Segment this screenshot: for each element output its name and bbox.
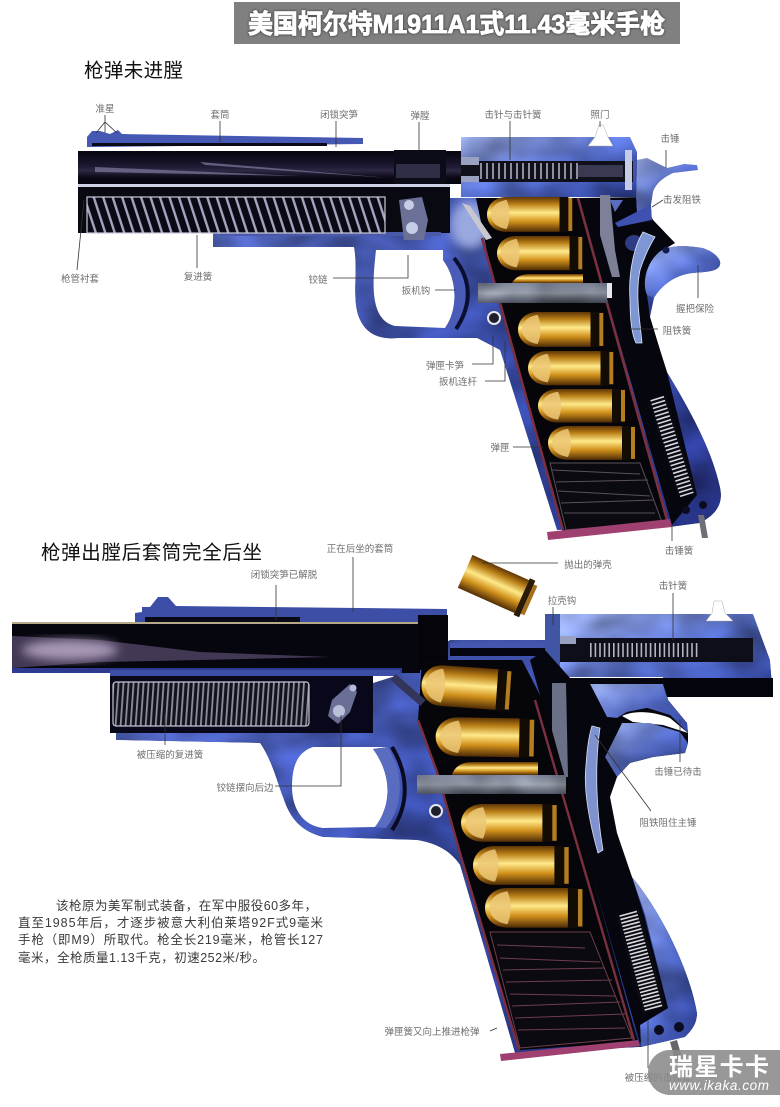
label: rear sight — [590, 109, 610, 127]
magazine spring — [550, 463, 662, 530]
label: extractor — [548, 595, 576, 625]
label: firing pin and spring: 击针与击针簧 — [484, 109, 542, 121]
compressed recoil spring — [113, 682, 309, 726]
description paragraph: 该枪原为美军制式装备，在军中服役60多年， — [56, 898, 317, 913]
link — [328, 684, 357, 724]
frame mid strips — [450, 643, 545, 648]
slide stop bar — [417, 775, 566, 794]
labels: top pistol — [61, 104, 714, 557]
internals behind magazine — [530, 650, 688, 1043]
label: hammer cocked — [654, 720, 702, 778]
trigger shadow — [443, 258, 466, 328]
label: link: 铰链 — [308, 274, 328, 286]
chamber — [394, 150, 446, 184]
label: sear spring: 阻铁簧 — [663, 325, 692, 337]
magazine catch — [488, 312, 500, 324]
label: chamber: 弹膛 — [410, 110, 430, 122]
cartridges in magazine — [487, 197, 635, 460]
label: trigger bar — [439, 340, 505, 388]
recoil spring — [87, 197, 385, 233]
slide top strip — [87, 130, 363, 147]
ejected case — [457, 553, 539, 619]
disconnector — [630, 232, 655, 343]
label: link — [308, 255, 408, 286]
label: mainspring: 击锤簧 — [665, 545, 694, 557]
magazine — [476, 198, 668, 532]
label: sear holds hammer — [595, 735, 697, 829]
firing pin spring — [590, 643, 698, 657]
description paragraph: 手枪（即M9）所取代。枪全长219毫米，枪管长127 — [18, 932, 323, 947]
cocked hammer — [590, 684, 688, 733]
barrel — [78, 151, 462, 184]
hammer — [636, 158, 698, 220]
label: trigger — [402, 285, 456, 297]
firing pin channel — [461, 161, 633, 182]
label: front sight: 准星 — [95, 104, 115, 115]
label: link swung back — [216, 715, 341, 794]
watermark: www.ikaka.com — [669, 1078, 769, 1093]
grip screws — [682, 506, 690, 514]
label: ejected case: 抛出的弹壳 — [564, 559, 612, 571]
rear slide — [461, 137, 637, 197]
label: firing pin spring: 击针簧 — [659, 580, 688, 592]
rear sight — [706, 601, 733, 621]
magazine follower detail — [552, 683, 568, 777]
label: grip safety: 握把保险 — [676, 303, 714, 315]
barrel — [12, 622, 420, 673]
sear — [585, 726, 603, 853]
label: rear sight: 照门 — [590, 109, 610, 121]
label: barrel bushing — [61, 200, 99, 285]
magazine base plate — [547, 519, 672, 540]
label: compressed recoil spring — [137, 715, 204, 761]
description paragraph — [18, 898, 323, 965]
rear sight — [588, 125, 613, 146]
label: trigger bar: 扳机连杆 — [439, 376, 477, 388]
slide front block — [418, 615, 448, 670]
grip screws — [654, 1025, 664, 1035]
extractor — [545, 614, 562, 690]
label: firing pin and spring — [484, 109, 542, 160]
pin — [670, 1040, 682, 1060]
white gap in hammer — [622, 712, 688, 733]
label: compressed mainspring — [625, 1020, 692, 1084]
label: firing pin spring — [659, 580, 688, 640]
title banner — [234, 2, 680, 44]
label: slide: 套筒 — [210, 109, 230, 121]
label: lug disengaged: 闭锁突笋已解脱 — [251, 569, 318, 581]
heading: round not chambered: 枪弹未进膛 — [84, 60, 183, 82]
label: slide — [210, 109, 230, 142]
feed strip — [393, 677, 423, 703]
labels: bottom pistol — [137, 543, 702, 1084]
label: magazine: 弹匣 — [490, 442, 510, 454]
label: link swung back: 铰链摆向后边 — [216, 782, 274, 794]
label: sear: 击发阻铁 — [663, 194, 701, 206]
description paragraph: 直至1985年后，才逐步被意大利伯莱塔92F式9毫米 — [18, 915, 323, 930]
label: sear holds hammer: 阻铁阻住主锤 — [639, 817, 697, 829]
hammer spring — [628, 913, 654, 1010]
label: magazine catch — [426, 335, 493, 372]
firing pin channel — [560, 638, 753, 662]
frame body — [116, 640, 697, 1053]
label: recoil spring — [184, 235, 213, 283]
label: magazine spring pushes: 弹匣簧又向上推进枪弹 — [384, 1026, 480, 1038]
title banner: 美国柯尔特M1911A1式11.43毫米手枪 — [248, 9, 665, 39]
label: chamber — [410, 110, 430, 150]
under-slide section — [78, 186, 450, 233]
feed ramp — [462, 203, 492, 240]
label: recoiling slide — [327, 543, 393, 612]
label: compressed recoil spring: 被压缩的复进簧 — [137, 749, 204, 761]
label: hammer — [660, 133, 680, 168]
label: compressed mainspring: 被压缩的击锤簧 — [625, 1072, 692, 1084]
label: lug disengaged — [251, 569, 318, 620]
hammer spring — [657, 398, 687, 495]
rear slide — [560, 614, 773, 697]
trigger — [373, 747, 400, 828]
lower barrel section — [110, 676, 373, 733]
pin — [698, 515, 708, 538]
label: grip safety — [676, 265, 714, 315]
label: recoil spring: 复进簧 — [184, 271, 213, 283]
slide stop bar — [478, 283, 607, 303]
label: barrel bushing: 枪管衬套 — [61, 273, 99, 285]
watermark: 瑞星卡卡 — [669, 1054, 769, 1081]
internals behind magazine — [578, 197, 697, 525]
description paragraph: 毫米，全枪质量1.13千克，初速252米/秒。 — [18, 950, 265, 965]
label: sear spring — [630, 325, 692, 337]
label: locking lug — [320, 109, 358, 147]
slide top — [135, 597, 447, 622]
label: magazine catch: 弹匣卡笋 — [426, 360, 464, 372]
grip safety — [645, 246, 720, 298]
pistol cutaway: round not chambered — [78, 125, 721, 540]
label: front sight — [95, 104, 117, 133]
cartridges in magazine — [420, 664, 582, 928]
trigger guard opening — [292, 747, 388, 828]
pistol cutaway: slide fully recoiled — [12, 553, 773, 1061]
label: mainspring — [665, 525, 694, 557]
label: trigger: 扳机钩 — [402, 285, 430, 297]
label: hammer: 击锤 — [660, 133, 680, 145]
sear — [615, 205, 652, 227]
label: sear — [652, 194, 701, 207]
label: ejected case — [482, 559, 612, 571]
label: locking lug: 闭锁突笋 — [320, 109, 358, 121]
link — [399, 197, 428, 240]
heading: slide fully recoiled: 枪弹出膛后套筒完全后坐 — [41, 542, 262, 564]
magazine — [418, 660, 638, 1050]
label: magazine — [490, 442, 543, 454]
grip safety — [605, 723, 688, 777]
magazine base plate — [500, 1040, 640, 1061]
firing pin spring — [480, 163, 578, 179]
frame body — [213, 198, 721, 530]
label: hammer cocked: 击锤已待击 — [654, 766, 702, 778]
watermark — [648, 1050, 780, 1095]
rear grip panel — [632, 877, 697, 1047]
label: extractor: 拉壳钩 — [548, 595, 576, 607]
magazine catch — [430, 805, 442, 817]
magazine spring extended — [490, 932, 632, 1048]
label: recoiling slide: 正在后坐的套筒 — [327, 543, 393, 555]
trigger guard opening — [374, 250, 455, 328]
